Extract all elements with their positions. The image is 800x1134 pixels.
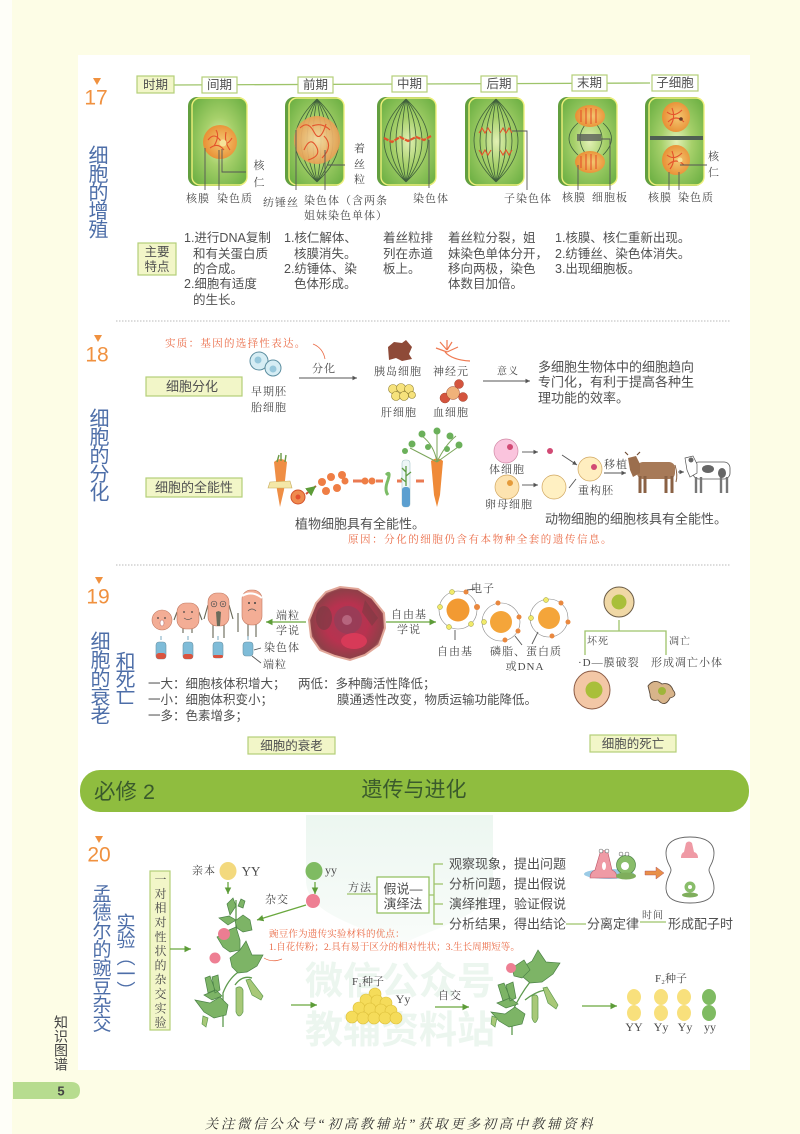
main features label: 特点 (144, 259, 170, 274)
stage labels (186, 141, 720, 222)
features: prophase: 色体形成。 (294, 276, 357, 291)
band title: 遗传与进化 (362, 778, 466, 802)
hypothetico-deductive method: 形成配子时 (668, 916, 733, 932)
senescence label (248, 737, 335, 754)
timeline: 后期 (486, 77, 512, 91)
senescence label: 细胞的衰老 (260, 738, 323, 753)
animal cloning sequence: 移植 (604, 457, 628, 471)
parents: 亲本 (192, 863, 216, 877)
telomere theory figures: 端粒 (263, 657, 287, 671)
features: interphase: 1.进行DNA复制 (184, 231, 271, 245)
hypothetico-deductive method: 演绎法 (383, 896, 423, 912)
timeline: 末期 (577, 76, 602, 90)
cell death diagram: 坏死 (587, 634, 609, 648)
significance text: 专门化，有利于提高各种生 (538, 374, 694, 390)
features: interphase (184, 231, 271, 307)
features: metaphase: 板上。 (383, 262, 421, 276)
features: anaphase: 妹染色单体分开， (448, 246, 548, 261)
green heading band (80, 770, 749, 812)
plant totipotency sequence (268, 428, 462, 507)
features: anaphase (448, 230, 548, 291)
features: telophase (555, 230, 690, 276)
features: prophase: 核膜消失。 (294, 246, 357, 261)
early embryo cells: 胎细胞 (251, 401, 287, 414)
cell death diagram: 形成凋亡小体 (651, 655, 723, 669)
red note: pea advantages: 1.自花传粉；2.具有易于区分的相对性状；3.生长周期短等。 (269, 941, 520, 953)
watermark: 教辅资料站 (305, 1010, 495, 1052)
watermark (305, 815, 495, 1052)
side label: 知识图谱 (53, 1014, 69, 1071)
free radical theory: 自由基 (391, 607, 427, 621)
senescence features: 一大：细胞核体积增大； (148, 676, 286, 691)
red note: pea advantages: 豌豆作为遗传实验材料的优点： (269, 928, 405, 940)
section 18 title: 细胞的分化 (86, 408, 109, 502)
differentiated cell types: 神经元 (433, 364, 469, 378)
arrow: significance: 意义 (497, 366, 519, 378)
vertical label box (150, 871, 170, 1030)
differentiation label (146, 377, 242, 396)
timeline: 间期 (207, 78, 232, 92)
telomere theory figures: 端粒 (276, 608, 300, 622)
features: prophase: 2.纺锤体、染 (284, 261, 357, 276)
main features label (138, 243, 176, 275)
F1 seeds: Yy (396, 992, 410, 1006)
cell death diagram: ·D—膜破裂 (578, 655, 640, 669)
features: anaphase: 移向两极，染色 (448, 261, 536, 276)
section 20: Mendel pea hybridisation (87, 836, 733, 1035)
section 18: cell differentiation (85, 335, 730, 546)
stage labels: 核膜 (186, 191, 210, 205)
significance text: 理功能的效率。 (538, 390, 629, 406)
cell: telophase (558, 97, 617, 190)
free radical theory: 磷脂、蛋白质 (490, 644, 562, 658)
watermark: 微信公众号 (305, 961, 495, 1003)
red note: essence: 实质：基因的选择性表达。 (165, 336, 307, 350)
arrow: differentiation (299, 361, 357, 378)
parents (192, 862, 337, 920)
hypothetico-deductive method: 分析问题，提出假说 (449, 876, 566, 892)
hypothetico-deductive method: 方法 (348, 880, 372, 894)
section 17 number: 17 (84, 86, 108, 110)
red note: essence (165, 336, 325, 359)
free radical theory (386, 581, 570, 673)
plant totipotency text: 植物细胞具有全能性。 (295, 516, 425, 532)
features: interphase: 和有关蛋白质 (193, 246, 268, 261)
section 19: senescence and death (86, 577, 723, 754)
self-pollination arrow: 自交 (438, 988, 462, 1002)
senescence features (148, 676, 537, 723)
stage labels: 核膜 (562, 190, 586, 204)
arrow to F2 seeds (582, 1005, 617, 1007)
differentiated cell types: 胰岛细胞 (374, 364, 422, 378)
features: prophase: 1.核仁解体、 (284, 231, 357, 245)
animal cloning sequence: 卵母细胞 (485, 498, 533, 511)
death label: 细胞的死亡 (602, 736, 664, 751)
differentiation label: 细胞分化 (166, 379, 218, 394)
segregation cartoon (584, 837, 714, 903)
F2 seeds: YY (625, 1020, 643, 1034)
stage labels: 姐妹染色单体） (304, 208, 388, 222)
timeline: 时期 (143, 78, 168, 92)
features: telophase: 1.核膜、核仁重新出现。 (555, 230, 690, 245)
differentiated cell types: 血细胞 (433, 406, 469, 419)
animal cloning sequence: 重构胚 (578, 483, 614, 497)
red note: reason: 原因：分化的细胞仍含有本物种全套的遗传信息。 (348, 532, 613, 546)
self-pollination arrow (435, 988, 469, 1007)
F2 seeds (625, 972, 716, 1034)
timeline (137, 75, 698, 93)
animal cloning sequence (485, 439, 730, 511)
animal totipotency text: 动物细胞的细胞核具有全能性。 (545, 512, 727, 526)
section 20 number: 20 (87, 844, 111, 866)
pea plant 1 (195, 898, 263, 1027)
section 17: cell proliferation (84, 75, 720, 307)
telomere theory figures: 染色体 (264, 640, 300, 654)
stage labels: 仁 (708, 166, 720, 179)
F2 seeds: Yy (678, 1020, 692, 1034)
hypothetico-deductive method: 分析结果，得出结论 (449, 916, 566, 932)
stage labels: 染色质 (678, 190, 714, 204)
cell: metaphase (377, 97, 436, 188)
totipotency label: 细胞的全能性 (155, 480, 233, 495)
early embryo cells (250, 352, 287, 414)
parents: 杂交 (265, 892, 289, 906)
free radical theory: 或DNA (506, 660, 544, 673)
features: interphase: 2.细胞有适度 (184, 276, 257, 291)
section 20 title: 孟德尔的豌豆杂交 (90, 884, 111, 1032)
cell death diagram (574, 587, 723, 709)
section 19 title: 细胞的衰老 (87, 631, 110, 725)
stage labels: 纺锤丝 (263, 196, 299, 209)
free radical theory: 电子 (471, 581, 495, 595)
cell: daughter cells (645, 97, 707, 190)
hypothetico-deductive method: 时间 (642, 908, 664, 922)
stage labels: 着 (354, 141, 366, 155)
telomere theory figures (152, 590, 306, 671)
stage labels: 核膜 (648, 190, 672, 204)
cell: interphase (188, 97, 247, 190)
significance text (538, 360, 694, 406)
features: telophase: 2.纺锤丝、染色体消失。 (555, 246, 690, 261)
features: metaphase: 着丝粒排 (383, 230, 434, 245)
footer note: 关注微信公众号“初高教辅站”获取更多初高中教辅资料 (205, 1116, 595, 1132)
features: metaphase: 列在赤道 (383, 247, 434, 261)
early embryo cells: 早期胚 (251, 384, 287, 398)
cell: anaphase (465, 97, 527, 190)
features: anaphase: 着丝粒分裂，姐 (448, 230, 536, 245)
timeline: 中期 (397, 76, 422, 91)
stage labels: 染色体 (413, 191, 449, 205)
stage labels: 核 (254, 158, 266, 172)
features: anaphase: 体数目加倍。 (448, 276, 523, 291)
free radical theory: 学说 (397, 623, 421, 636)
arrow: differentiation: 分化 (312, 361, 336, 375)
band label: required course 2: 必修 2 (94, 780, 155, 804)
differentiated cell types: 肝细胞 (381, 406, 417, 419)
F1 seeds: F₁种子 (352, 975, 384, 988)
hypothetico-deductive method: 分离定律 (587, 916, 639, 932)
features: interphase: 的生长。 (193, 292, 243, 307)
stage labels: 粒 (354, 172, 366, 186)
telomere theory figures: 学说 (276, 624, 300, 637)
hypothetico-deductive method: 假说— (383, 882, 423, 896)
F1 seeds (346, 975, 410, 1024)
cell death diagram: 凋亡 (669, 634, 691, 648)
differentiated cell types (374, 340, 470, 419)
section 19 number: 19 (86, 586, 110, 608)
F2 seeds: F₂种子 (655, 972, 687, 985)
stage labels: 染色体（含两条 (304, 193, 388, 207)
cell: prophase (285, 97, 345, 190)
section 17 title: 细胞的增殖 (85, 145, 108, 239)
F2 seeds: Yy (654, 1020, 668, 1034)
senescence features: 一多：色素增多； (148, 708, 248, 723)
timeline: 子细胞 (656, 76, 694, 90)
arrow from box to plant (170, 948, 191, 950)
features: prophase (284, 231, 357, 291)
arrow: significance (483, 366, 530, 381)
main features label: 主要 (144, 245, 170, 259)
page number tab (13, 1082, 80, 1099)
significance text: 多细胞生物体中的细胞趋向 (538, 360, 694, 374)
features: metaphase (383, 230, 434, 276)
senescence features: 一小：细胞体积变小； (148, 692, 273, 707)
senescence features: 两低：多种酶活性降低； (298, 676, 436, 691)
stage labels: 仁 (254, 176, 266, 189)
free radical theory: 自由基 (437, 644, 473, 658)
section 18 number: 18 (85, 344, 109, 366)
stage labels: 染色质 (217, 191, 253, 205)
arrow to F1 seeds (291, 1004, 317, 1006)
features: interphase: 的合成。 (193, 261, 243, 276)
white content panel (78, 55, 750, 1070)
senescence features: 膜通透性改变，物质运输功能降低。 (337, 692, 537, 707)
red note: pea advantages (264, 928, 520, 961)
aged cell illustration (309, 587, 385, 660)
features: telophase: 3.出现细胞板。 (555, 262, 640, 276)
page number tab: 5 (57, 1084, 65, 1098)
stage labels: 丝 (354, 158, 366, 171)
parents: yy (325, 863, 337, 877)
F2 seeds: yy (704, 1020, 716, 1034)
hypothetico-deductive method: 演绎推理，验证假说 (449, 896, 566, 912)
vertical label box: 一对相对性状的杂交实验 (153, 873, 167, 1030)
parents: YY (242, 864, 261, 878)
pea plant 2 (491, 950, 560, 1035)
animal cloning sequence: 体细胞 (489, 462, 525, 476)
section 19 subtitle: 和死亡 (112, 651, 135, 705)
totipotency label (146, 478, 242, 497)
hypothetico-deductive method (347, 856, 733, 932)
stage labels: 核 (708, 149, 720, 163)
stage labels: 子染色体 (504, 191, 552, 205)
hypothetico-deductive method: 观察现象，提出问题 (449, 856, 566, 872)
death label (590, 735, 676, 752)
section 20 subtitle: 实验（一） (114, 913, 135, 998)
stage labels: 细胞板 (592, 190, 628, 204)
timeline: 前期 (303, 77, 328, 92)
